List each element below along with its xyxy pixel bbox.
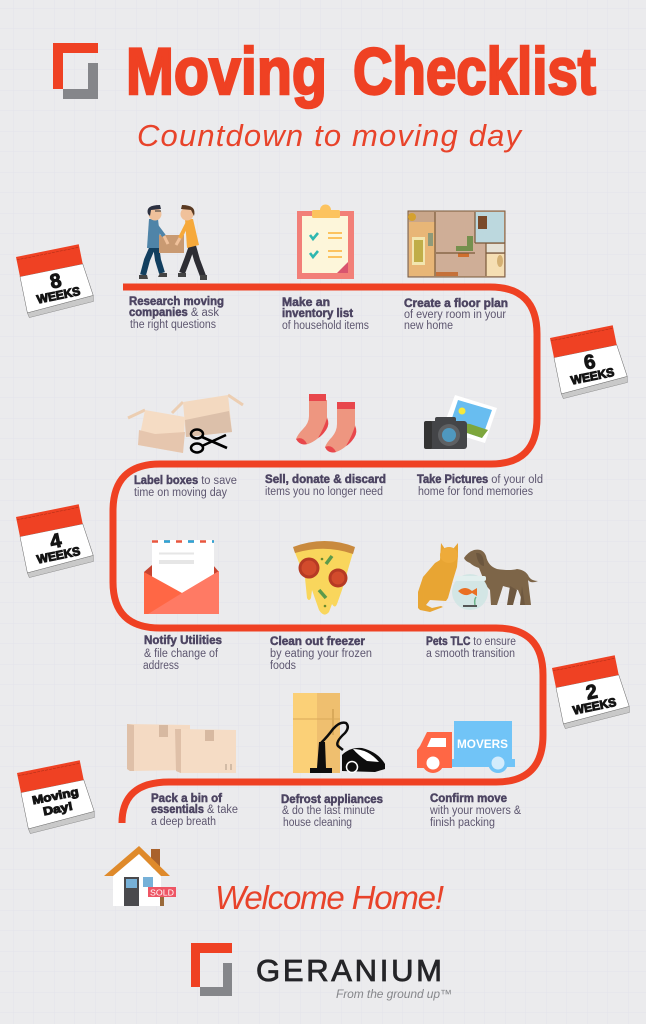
icon: sold house: SOLD [150,888,174,898]
caption: notify utilities: Notify Utilities [144,635,222,647]
icon: stacked boxes [127,724,236,773]
caption: pack a bin [151,793,238,828]
caption: research moving companies: Research moving [129,296,224,308]
caption: floor plan: new home [404,320,453,332]
calendar: 4 weeks: 4 [48,530,64,553]
caption: inventory list: inventory list [282,308,353,320]
icon: movers truck [417,721,515,773]
title: Moving [126,34,327,108]
caption: research moving companies: the right questions [130,319,216,331]
subtitle: Countdown to moving day [137,118,524,153]
caption: sell donate discard [265,474,386,498]
caption: research moving companies [129,296,224,331]
caption: notify utilities: & file change of [144,648,219,660]
icon: cat dog and fishbowl [418,543,538,612]
caption: label boxes [134,475,237,499]
calendar: moving day [17,759,96,834]
caption: pets tlc: a smooth transition [426,648,515,660]
caption: pack a bin: a deep breath [151,816,216,828]
caption: defrost appliances: house cleaning [283,817,352,829]
caption: notify utilities: address [143,660,179,672]
caption: inventory list: of household items [282,320,369,332]
welcome home heading: Welcome Home! [215,879,444,916]
caption: defrost appliances [281,794,383,829]
caption: take pictures [417,474,543,498]
caption: pack a bin: Pack a bin of [151,793,222,805]
calendar: 2 weeks: WEEKS [572,695,617,718]
caption: defrost appliances: & do the last minute [282,805,375,817]
caption: floor plan: of every room in your [404,309,506,321]
caption: sell donate discard: Sell, donate & discard [265,474,386,486]
icon: two people carrying box [139,205,207,280]
calendar: 6 weeks [550,324,629,399]
caption: clean out freezer: Clean out freezer [270,636,366,648]
caption: take pictures: home for fond memories [418,486,533,498]
calendar: 6 weeks: WEEKS [570,365,615,388]
calendar: 2 weeks: 2 [584,681,599,704]
icon: clipboard [297,204,354,279]
caption: label boxes: Label boxes to save [134,475,237,487]
calendar: 8 weeks: 8 [48,270,63,293]
caption: label boxes: time on moving day [134,487,227,499]
caption: research moving companies: companies & ask [129,307,219,319]
icon: envelope [144,540,219,614]
icon: pizza slice [293,541,355,615]
caption: notify utilities [143,635,222,672]
icon: movers truck: MOVERS [457,737,508,751]
calendar: moving day: Day! [42,801,74,818]
calendar: 4 weeks: WEEKS [36,544,81,567]
caption: defrost appliances: Defrost appliances [281,794,383,806]
caption: clean out freezer [270,636,372,672]
logo: top mark [53,43,98,99]
calendar: 2 weeks [552,654,631,729]
logo: Geranium: GERANIUM [256,953,442,988]
calendar: 8 weeks [16,243,95,318]
caption: floor plan [404,298,508,332]
caption: sell donate discard: items you no longer need [265,486,383,498]
caption: confirm move: finish packing [430,817,495,829]
title: Checklist [353,34,596,108]
logo: Geranium: From the ground up™ [336,987,452,1001]
icon: camera and photo [424,395,497,449]
calendar: 8 weeks: WEEKS [36,284,81,307]
timeline path [113,287,543,823]
icon: floor plan [408,211,505,277]
caption: confirm move: with your movers & [429,805,521,817]
icon: open boxes and scissors [128,395,243,453]
caption: floor plan: Create a floor plan [404,298,508,310]
title [126,34,596,108]
logo: Geranium [191,943,452,1001]
caption: confirm move: Confirm move [430,793,507,805]
caption: pets tlc [426,636,516,660]
caption: clean out freezer: by eating your frozen [270,648,372,660]
icon: sold house [104,846,176,906]
calendar: 6 weeks: 6 [582,351,597,374]
caption: confirm move [429,793,521,829]
calendar: 4 weeks [16,503,95,578]
icon: socks [296,394,356,452]
calendar: moving day: Moving [31,786,80,807]
caption: pack a bin: essentials & take [151,804,238,816]
caption: pets tlc: Pets TLC to ensure [426,636,516,648]
caption: clean out freezer: foods [270,660,296,672]
caption: take pictures: Take Pictures of your old [417,474,543,486]
caption: inventory list [282,297,369,332]
icon: fridge and vacuum [293,693,385,773]
caption: inventory list: Make an [282,297,330,309]
